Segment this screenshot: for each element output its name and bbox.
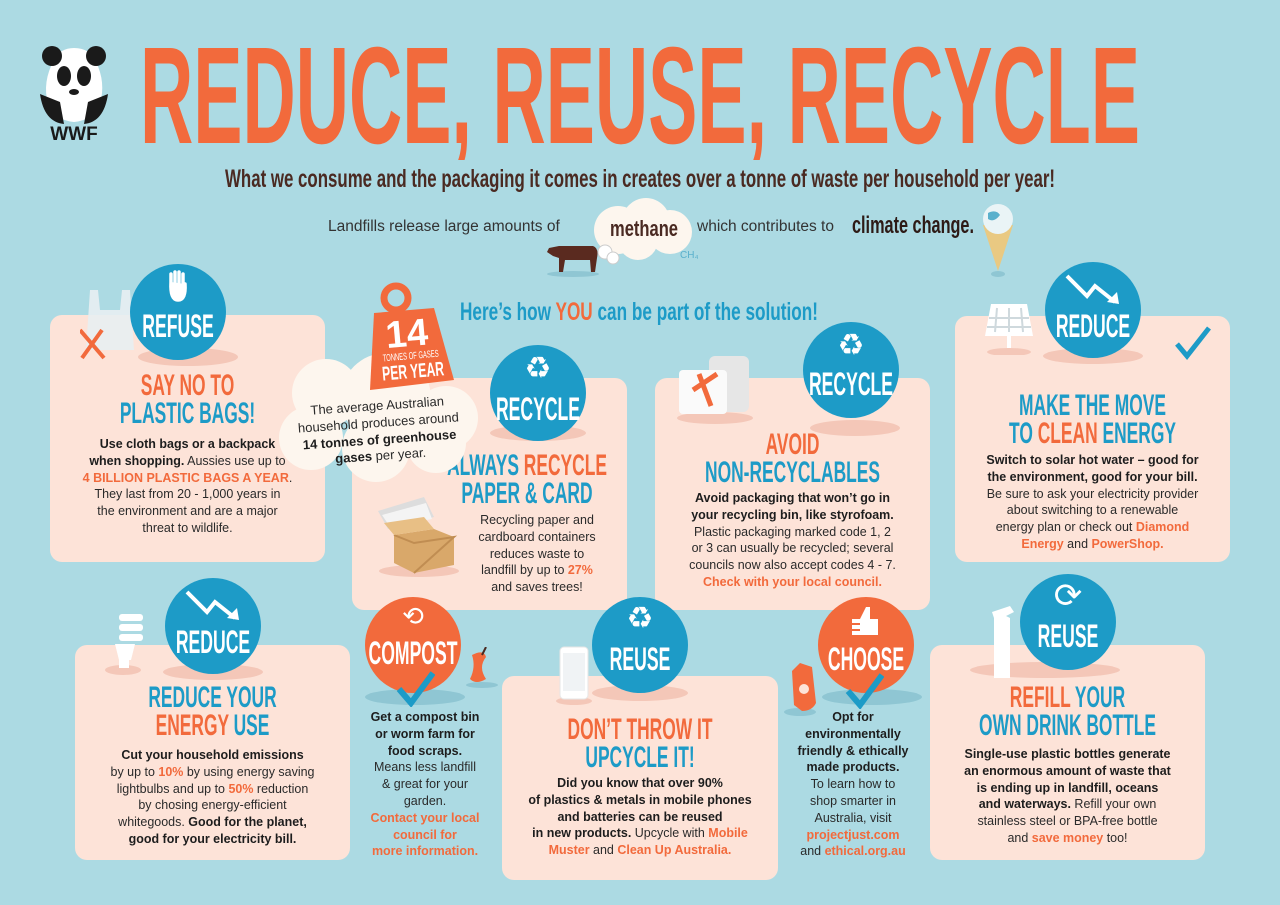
- text: made products.: [807, 759, 899, 774]
- panel: reuse upcycle: [502, 597, 778, 880]
- icon: solar panel: [985, 304, 1033, 355]
- text: shop smarter in: [810, 793, 896, 808]
- text: They last from 20 - 1,000 years in: [95, 486, 280, 501]
- callout: 14 tonnes: [279, 282, 478, 482]
- text: Energy and PowerShop.: [1021, 536, 1164, 551]
- text: friendly & ethically: [798, 743, 908, 758]
- icon: compost circle: [365, 597, 461, 693]
- text: 4 BILLION PLASTIC BAGS A YEAR.: [83, 470, 292, 485]
- panel: compost: [365, 597, 498, 858]
- heading: [1009, 389, 1176, 450]
- text: Plastic packaging marked code 1, 2: [694, 524, 891, 539]
- text: or 3 can usually be recycled; several: [692, 540, 893, 555]
- icon: plastic bag: [80, 290, 134, 360]
- text: reduces waste to: [490, 546, 584, 561]
- text: and save money too!: [1007, 830, 1128, 845]
- text: [297, 393, 459, 466]
- heading: PAPER & CARD: [461, 477, 593, 510]
- text: Did you know that over 90%: [557, 775, 723, 790]
- text: [478, 512, 596, 594]
- icon: reduce circle: REDUCE: [1056, 308, 1130, 344]
- text: and saves trees!: [491, 579, 583, 594]
- icon: reduce circle: REDUCE: [176, 624, 250, 660]
- text: garden.: [404, 793, 446, 808]
- heading: PLASTIC BAGS!: [120, 397, 255, 430]
- heading: SAY NO TO: [141, 369, 234, 402]
- text: Contact your local: [371, 810, 479, 825]
- text: Cut your household emissions: [121, 747, 304, 762]
- icon: compost circle: COMPOST: [369, 635, 457, 671]
- heading: DON’T THROW IT: [568, 713, 712, 746]
- text: is ending up in landfill, oceans: [977, 780, 1158, 795]
- text: environmentally: [805, 726, 901, 741]
- icon: refuse circle: REFUSE: [142, 308, 214, 344]
- icon: recycle circle: RECYCLE: [809, 366, 893, 402]
- panel: refuse: [50, 264, 325, 562]
- icon: weight: [370, 282, 454, 390]
- icon: reduce circle: [165, 578, 261, 674]
- heading: [120, 369, 255, 430]
- text: when shopping. Aussies use up to: [89, 453, 286, 468]
- heading: [447, 449, 607, 510]
- text: gases per year.: [335, 445, 427, 466]
- icon: apple core: [466, 647, 498, 688]
- icon: checkmark: [396, 671, 435, 707]
- text: whitegoods. Good for the planet,: [118, 814, 307, 829]
- text: & great for your: [382, 776, 468, 791]
- text: Australia, visit: [814, 810, 891, 825]
- text: [82, 436, 292, 535]
- text: Get a compost bin: [371, 709, 479, 724]
- heading: [910, 684, 1225, 740]
- text: councils now also accept codes 4 - 7.: [689, 557, 896, 572]
- icon: reuse circle: REUSE: [1038, 618, 1098, 654]
- text: in new products. Upcycle with Mobile: [532, 825, 748, 840]
- text: Switch to solar hot water – good for: [986, 452, 1199, 467]
- text: The average Australian: [310, 393, 444, 418]
- text: Use cloth bags or a backpack: [100, 436, 275, 451]
- icon: styrofoam: [677, 356, 753, 424]
- text: [916, 746, 1219, 847]
- text: Recycling paper and: [480, 512, 594, 527]
- text: Means less landfill: [374, 759, 476, 774]
- heading: [148, 681, 277, 742]
- text: [689, 490, 896, 589]
- text: [775, 709, 931, 860]
- methane line: Landfills release large amounts of: [328, 218, 560, 235]
- panel: reduce energy use: [75, 578, 350, 860]
- text: energy plan or check out Diamond: [996, 519, 1189, 534]
- text: good for your electricity bill.: [129, 831, 296, 846]
- icon: refuse circle: [130, 264, 226, 360]
- text: by chosing energy-efficient: [138, 797, 287, 812]
- heading: OWN DRINK BOTTLE: [979, 709, 1156, 742]
- text: your recycling bin, like styrofoam.: [691, 507, 894, 522]
- icon: recycle circle: ♻: [838, 329, 864, 362]
- panel: refill bottle: [930, 574, 1205, 860]
- icon: reduce circle: [1045, 262, 1141, 358]
- icon: choose circle: CHOOSE: [828, 641, 904, 677]
- icon: lightbulb: [105, 614, 143, 675]
- icon: mobile phone: [556, 646, 592, 705]
- heading: MAKE THE MOVE: [1019, 389, 1166, 422]
- icon: methane cloud: [594, 198, 698, 260]
- text: [986, 452, 1199, 551]
- panel: avoid non-recyclables: [655, 322, 930, 610]
- icon: drink bottle: [988, 604, 1018, 684]
- text: or worm farm for: [375, 726, 475, 741]
- text: Single-use plastic bottles generate: [965, 746, 1170, 761]
- icon: methane cloud: methane: [610, 216, 678, 241]
- text: more information.: [372, 843, 478, 858]
- icon: weight: 14: [384, 312, 430, 357]
- heading: ENERGY USE: [156, 709, 269, 742]
- methane line: [328, 198, 1013, 277]
- text: Be sure to ask your electricity provider: [987, 486, 1198, 501]
- text: 14 tonnes of greenhouse: [302, 426, 457, 452]
- icon: choose circle: [818, 597, 914, 693]
- text: of plastics & metals in mobile phones: [528, 792, 752, 807]
- text: lightbulbs and up to 50% reduction: [117, 781, 308, 796]
- icon: compost circle: ⟲: [402, 601, 424, 631]
- text: cardboard containers: [478, 529, 596, 544]
- text: [110, 747, 314, 846]
- heading: REDUCE YOUR: [148, 681, 277, 714]
- text: stainless steel or BPA-free bottle: [977, 813, 1158, 828]
- icon: checkmark: [844, 669, 884, 709]
- text: council for: [393, 827, 457, 842]
- text: Avoid packaging that won’t go in: [695, 490, 890, 505]
- panel: clean energy: [955, 262, 1230, 562]
- panel: recycle paper: [352, 345, 627, 610]
- icon: reuse circle: [1020, 574, 1116, 670]
- text: and waterways. Refill your own: [979, 796, 1156, 811]
- text: [371, 709, 479, 858]
- icon: reuse circle: ⟳: [1054, 577, 1082, 615]
- icon: cow: [547, 244, 620, 277]
- logo: WWF panda: [40, 46, 108, 142]
- heading: UPCYCLE IT!: [585, 741, 695, 774]
- text: projectjust.com: [807, 827, 899, 842]
- text: To learn how to: [811, 776, 895, 791]
- text: by up to 10% by using energy saving: [110, 764, 314, 779]
- icon: cloud: [279, 355, 478, 482]
- text: about switching to a renewable: [1007, 502, 1178, 517]
- panel: choose: [782, 597, 927, 862]
- icon: reuse circle: [592, 597, 688, 693]
- icon: checkmark: [1175, 326, 1211, 360]
- text: threat to wildlife.: [142, 520, 233, 535]
- text: [488, 775, 792, 859]
- heading: TO CLEAN ENERGY: [1009, 417, 1176, 450]
- icon: recycle circle: ♻: [525, 352, 551, 385]
- text: landfill by up to 27%: [481, 562, 593, 577]
- icon: reuse circle: REUSE: [610, 641, 670, 677]
- icon: recycle circle: RECYCLE: [496, 391, 580, 427]
- heading: [705, 428, 880, 489]
- text: Muster and Clean Up Australia.: [549, 842, 731, 857]
- heading: [568, 713, 712, 774]
- text: household produces around: [297, 409, 459, 435]
- heading: REFILL YOUR: [1010, 681, 1125, 714]
- methane line: which contributes to: [697, 218, 834, 235]
- text: the environment, good for your bill.: [987, 469, 1198, 484]
- text: an enormous amount of waste that: [964, 763, 1171, 778]
- heading: AVOID: [766, 428, 819, 461]
- text: and ethical.org.au: [800, 843, 906, 858]
- text: and batteries can be reused: [557, 809, 723, 824]
- text: the environment and are a major: [97, 503, 278, 518]
- icon: recycle circle: [490, 345, 586, 441]
- section heading: Here’s how YOU can be part of the solution!: [460, 298, 818, 326]
- icon: recycle circle: [803, 322, 899, 418]
- icon: papers and box: [378, 497, 459, 577]
- heading: ALWAYS RECYCLE: [447, 449, 607, 482]
- icon: reuse circle: ♻: [627, 602, 653, 635]
- text: Check with your local council.: [703, 574, 882, 589]
- heading: NON-RECYCLABLES: [705, 456, 880, 489]
- icon: bottle: [782, 657, 822, 717]
- text: food scraps.: [388, 743, 462, 758]
- icon: melting globe cone: [983, 204, 1013, 277]
- text: Opt for: [832, 709, 874, 724]
